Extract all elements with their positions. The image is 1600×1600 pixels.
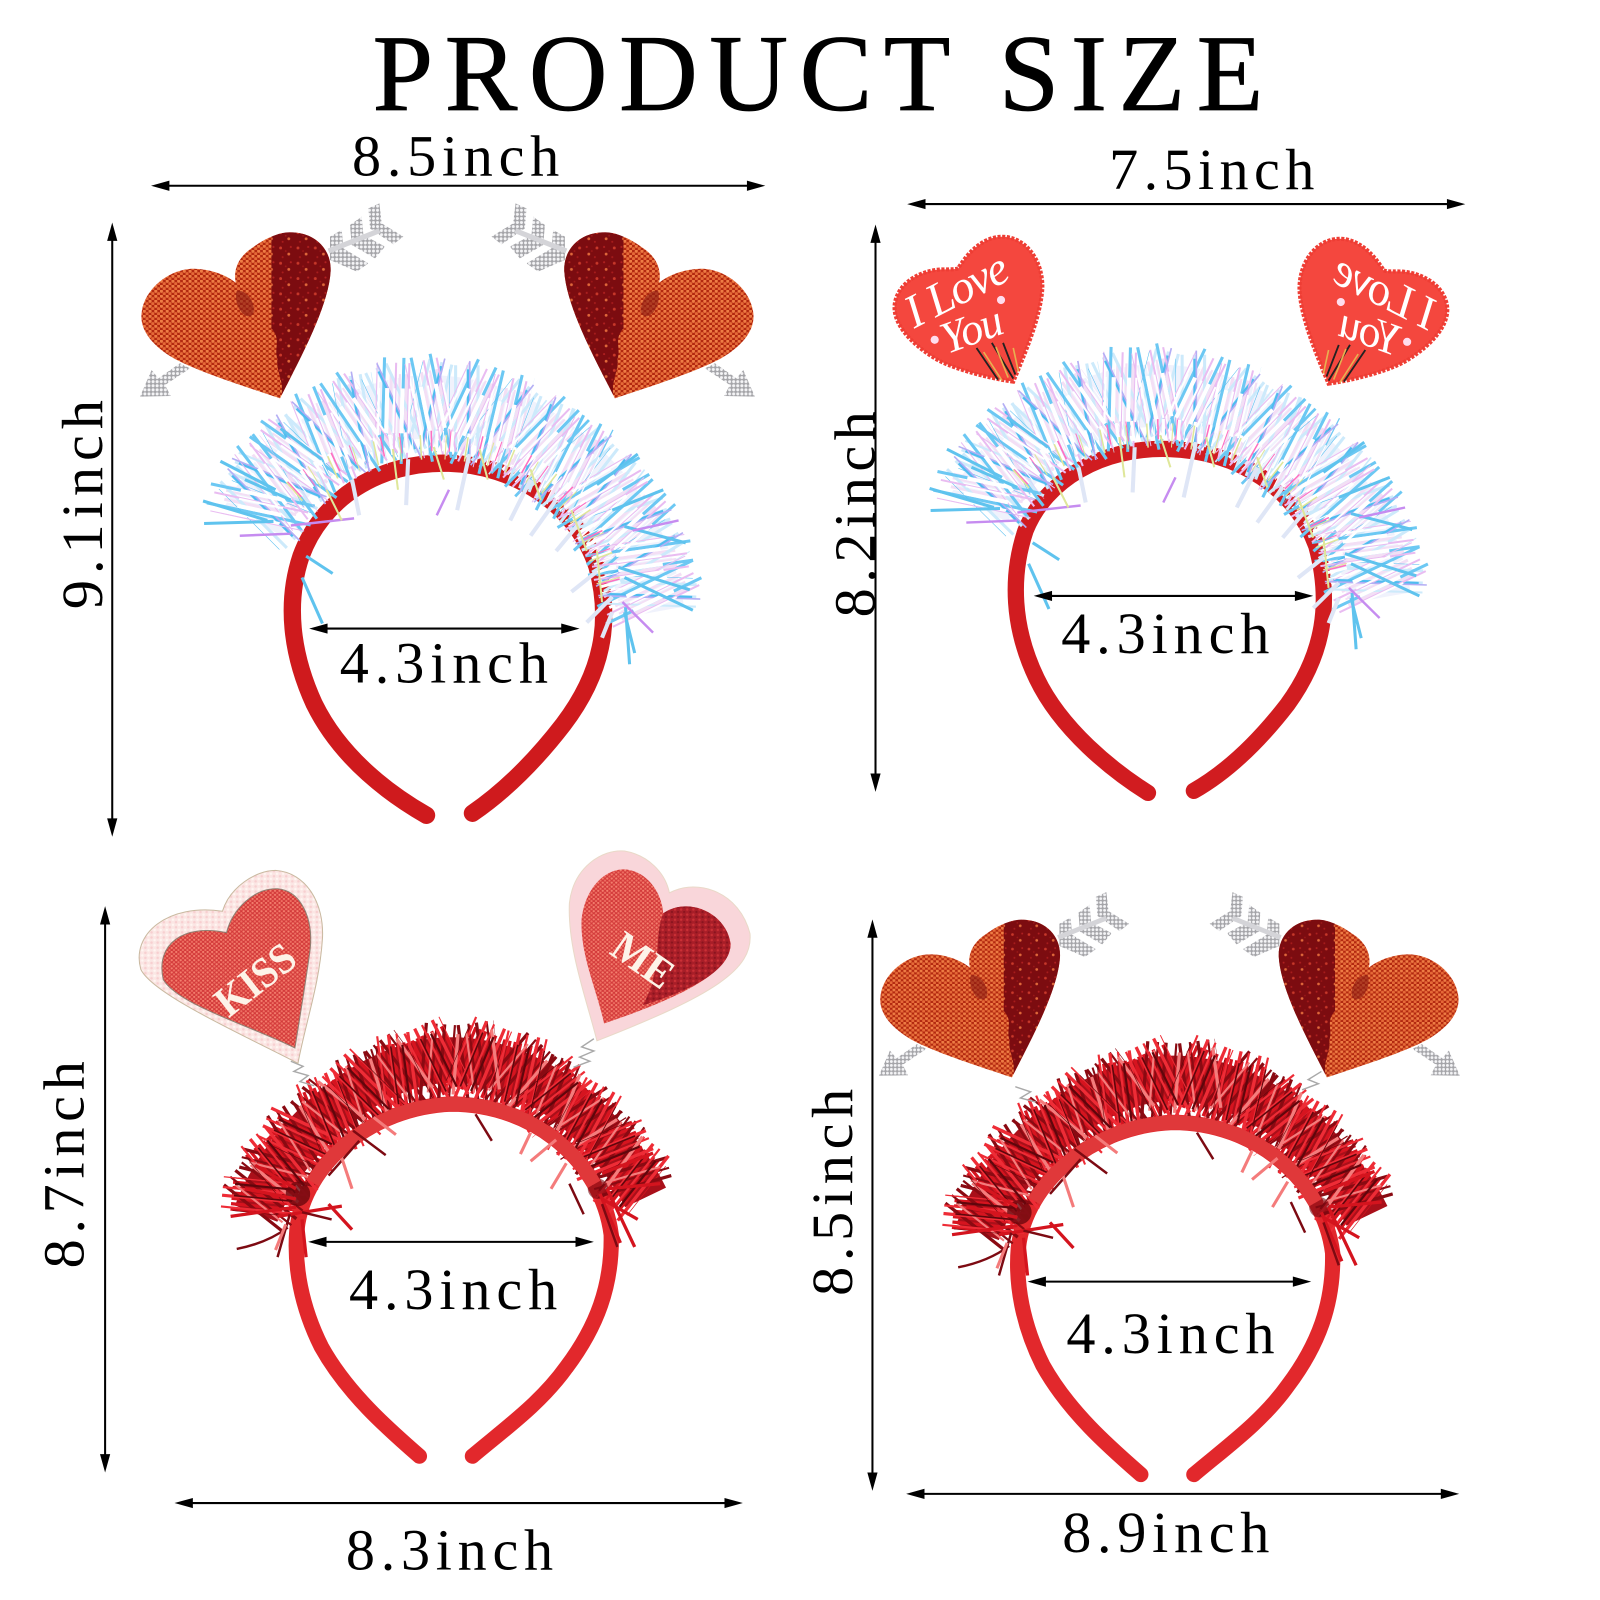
springs: [1015, 1071, 1321, 1102]
band: [1016, 449, 1324, 793]
measure: bottom width 8.9inch: 8.9inch: [1062, 1500, 1269, 1565]
band: [292, 463, 604, 815]
headband 3: red tinsel with KISS and ME hearts: [139, 851, 750, 1456]
left heart: I Love You: [895, 237, 1042, 382]
measure: inner width 4.3inch (headband 2): [1034, 591, 1313, 666]
ME heart: ME: [602, 923, 683, 999]
measure: inner width 4.3inch (headband 1): [309, 623, 580, 696]
measure: height 9.1inch: [50, 222, 117, 837]
left heart: I Love You: You: [933, 295, 1010, 363]
measure: bottom width 8.9inch: [906, 1489, 1459, 1565]
measure: inner width 4.3inch (headband 2): 4.3inch: [1061, 601, 1269, 666]
measure: top width 7.5inch: [907, 137, 1465, 209]
measure: inner width 4.3inch (headband 3): [308, 1237, 594, 1322]
title: PRODUCT SIZE: [372, 13, 1263, 134]
springs: [291, 1039, 594, 1086]
right heart with arrow: [492, 203, 755, 398]
measure: height 8.5inch: 8.5inch: [800, 1089, 865, 1296]
KISS heart: [139, 870, 323, 1063]
measure: height 9.1inch: 9.1inch: [50, 400, 115, 609]
measure: inner width 4.3inch (headband 3): 4.3inch: [349, 1257, 557, 1322]
headband 2: iridescent tinsel with I Love You hearts: [895, 237, 1447, 793]
tinsel: [203, 403, 693, 664]
left heart with arrow: [140, 203, 403, 398]
measure: inner width 4.3inch (headband 4): [1028, 1277, 1311, 1366]
headband 4: red tinsel with sequin arrow hearts: [879, 892, 1460, 1474]
left heart: I Love You: I Love: [895, 242, 1017, 339]
headband 1: iridescent tinsel with sequin arrow hearts: [140, 203, 755, 815]
measure: height 8.7inch: 8.7inch: [32, 1061, 97, 1268]
measure: height 8.2inch: 8.2inch: [822, 411, 887, 617]
band and tinsel: [952, 1072, 1382, 1474]
measure: height 8.7inch: [32, 906, 110, 1472]
right heart: mirrored I Love You: [1299, 239, 1447, 384]
measure: bottom width 8.3inch: 8.3inch: [346, 1517, 553, 1582]
measure: inner width 4.3inch (headband 4): 4.3inch: [1066, 1301, 1274, 1366]
measure: top width 8.5inch: 8.5inch: [352, 124, 559, 189]
right heart with arrow: [1210, 892, 1460, 1077]
right heart: mirrored I Love You: I Love: [1324, 244, 1447, 341]
measure: height 8.2inch: [822, 224, 887, 792]
left heart with arrow: [879, 892, 1129, 1077]
measure: top width 7.5inch: 7.5inch: [1109, 137, 1314, 202]
KISS heart: KISS: [206, 934, 305, 1026]
band and red tinsel: [231, 1054, 660, 1456]
measure: top width 8.5inch: [151, 124, 765, 191]
tinsel: [930, 392, 1419, 649]
right heart: mirrored I Love You: You: [1332, 297, 1409, 366]
measure: height 8.5inch: [800, 919, 878, 1491]
measure: inner width 4.3inch (headband 1): 4.3inch: [340, 631, 548, 696]
measure: bottom width 8.3inch: [174, 1498, 743, 1582]
ME heart: [569, 851, 750, 1041]
